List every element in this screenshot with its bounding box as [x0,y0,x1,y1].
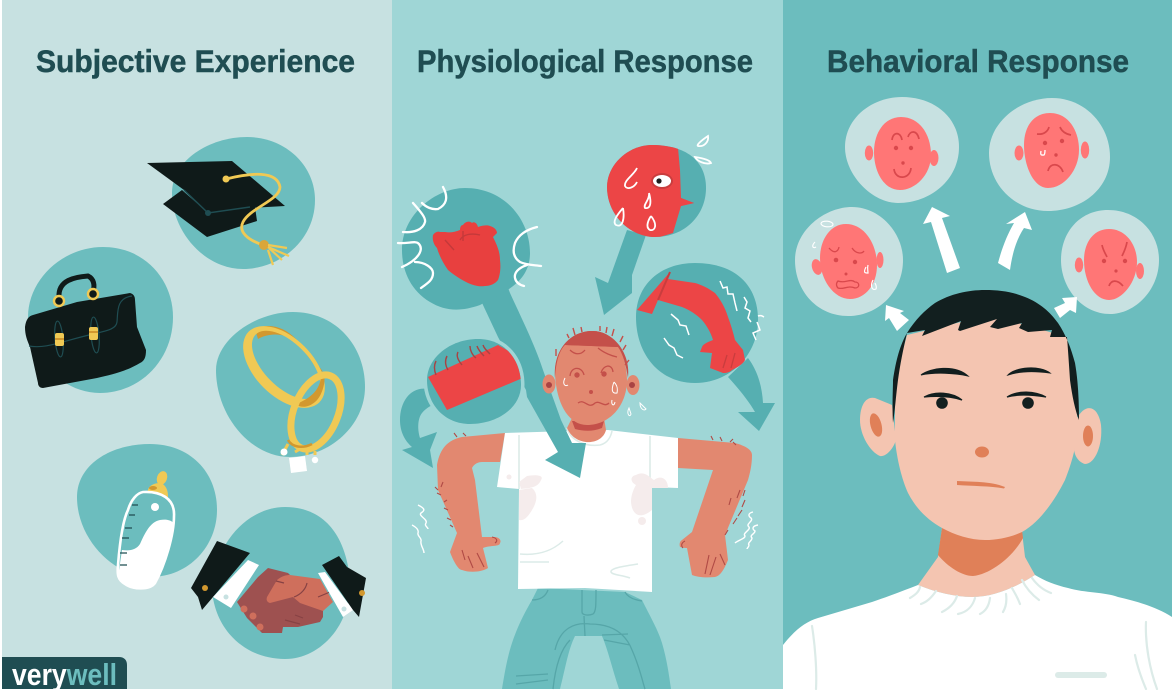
icon: wedding rings [216,311,365,473]
callout: red face with arrow [595,136,711,315]
person: left arm [435,433,505,572]
arrow: to worried face [885,305,909,331]
panel: physiological response [392,0,783,689]
title: behavioral response: Behavioral Response [827,43,1129,79]
person: neck [567,418,606,442]
title: physiological response: Physiological Response [417,43,753,79]
title: subjective experience: Subjective Experience [36,43,355,79]
icon: briefcase [25,247,173,393]
arrow: to angry face [1054,297,1077,318]
arrow: to sad face [998,212,1032,270]
bubble: angry face [1061,210,1159,314]
arrow: to happy face [923,207,960,273]
panel: subjective experience [2,0,392,690]
person: man with white sweater [783,290,1172,689]
person: t-shirt [497,428,678,592]
icon: baby bottle [77,444,217,588]
neck [918,528,1035,597]
bubble: worried face [795,207,903,316]
person: head [542,326,646,425]
callout: goosebumps skin with arrow [400,339,525,468]
person: right arm [678,436,752,577]
callout: pounding heart with arrow [398,187,586,478]
callout: shaking arm with arrow [636,263,775,431]
sweater [783,575,1172,689]
hair [893,290,1079,423]
neck shadow [938,528,1023,576]
icon: tremble lines left [412,505,428,553]
bubble: happy face [845,97,959,203]
icon: graduation cap [147,137,315,269]
face [895,315,1078,540]
panel: behavioral response [783,0,1172,689]
features [921,368,1050,488]
icon: handshake [191,507,366,659]
ears [860,398,1101,464]
icon: tremble lines right [735,512,758,549]
person: jeans [502,588,671,689]
bubble: sad face [989,98,1110,211]
